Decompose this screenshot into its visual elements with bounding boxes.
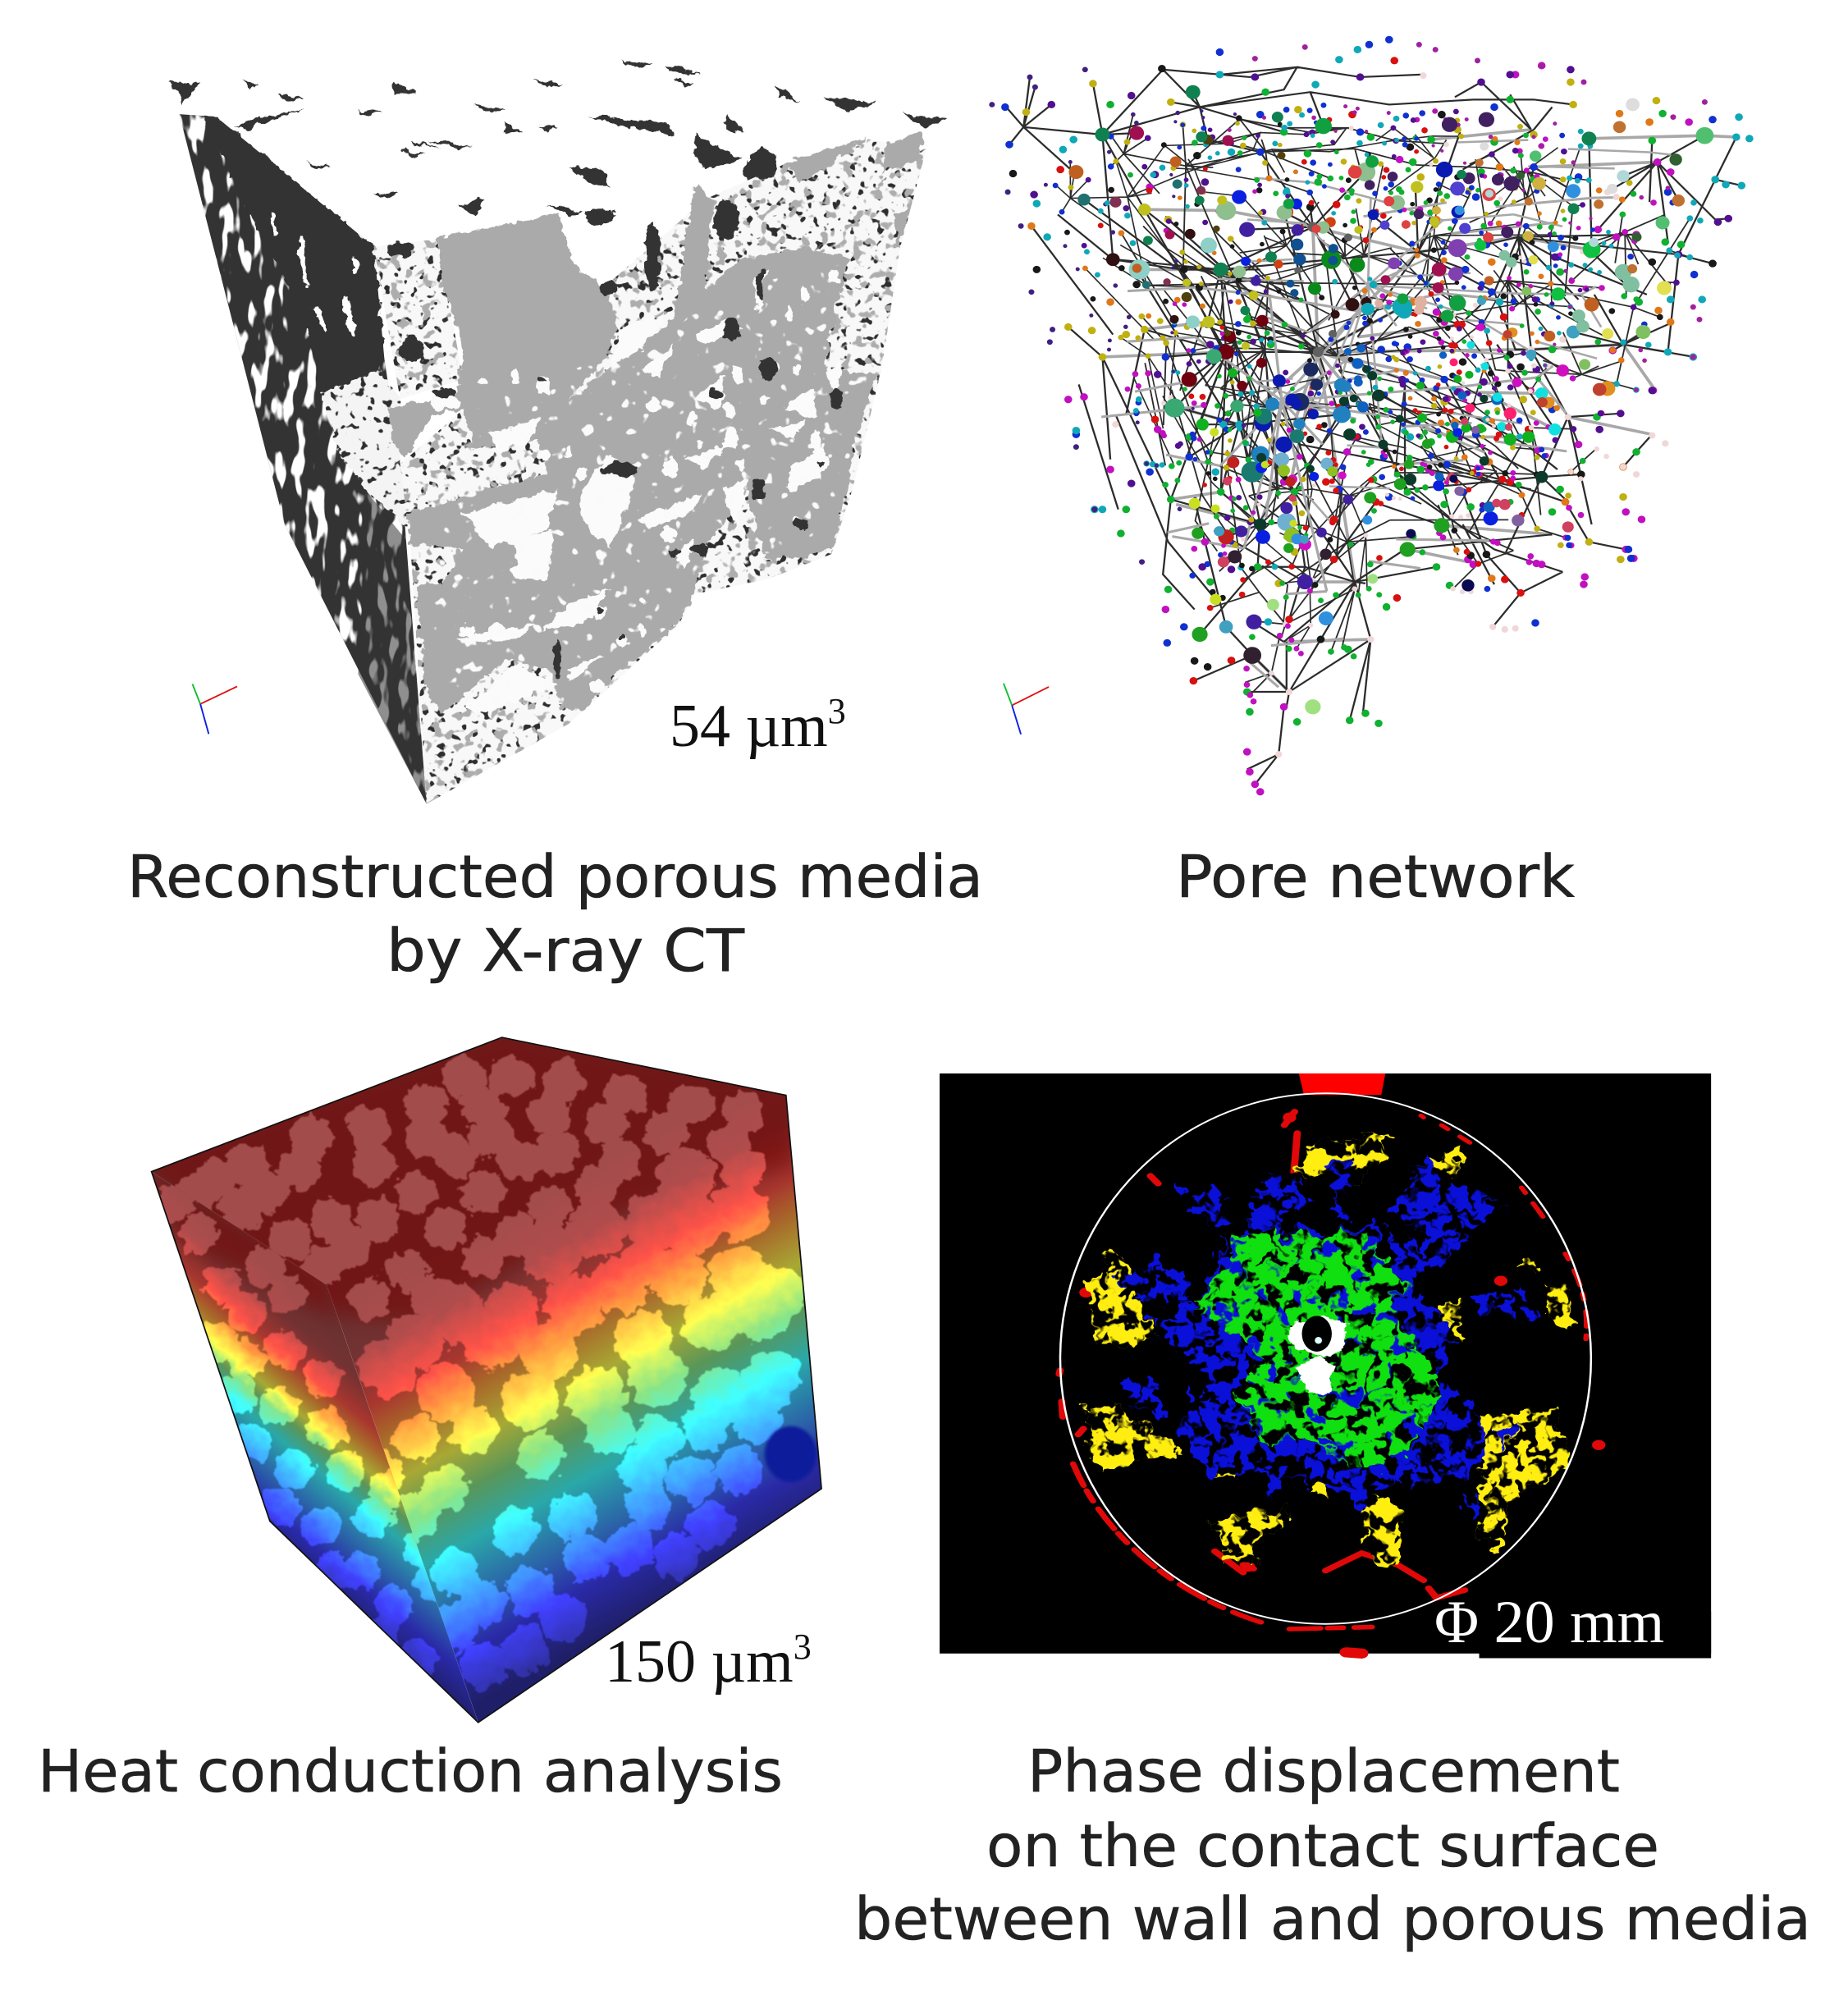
right and top faces with gradient <box>133 1026 821 1723</box>
red top bar <box>1299 1073 1385 1095</box>
scale label: 54 µm3: 3 <box>828 691 846 731</box>
black background <box>940 1073 1711 1654</box>
main gray cut face <box>387 131 921 714</box>
panel: pore network <box>992 39 1750 792</box>
top face dark pores <box>169 59 947 217</box>
white center <box>1288 1316 1347 1394</box>
panel: heat conduction cube <box>133 1026 821 1723</box>
axes indicator <box>1004 684 1049 735</box>
caption: heat conduction analysis: Heat conduction analysis <box>38 1737 783 1805</box>
dark lower left strip <box>358 494 427 804</box>
scale label: 150 µm3: 3 <box>794 1627 812 1667</box>
caption: phase displacement: between wall and porous media <box>854 1885 1811 1953</box>
solid dark shadow on upper left face <box>206 117 384 399</box>
cube outline <box>152 1037 821 1723</box>
panel: phase displacement map <box>940 1073 1711 1658</box>
central black hole <box>1302 1316 1332 1352</box>
pore nodes large <box>1076 92 1704 707</box>
caption: reconstructed porous media: by X-ray CT <box>387 917 745 985</box>
white boundary circle <box>1060 1093 1591 1624</box>
dark pore blob <box>765 1426 817 1482</box>
caption: phase displacement: Phase displacement <box>1027 1737 1620 1805</box>
caption: reconstructed porous media: Reconstructed porous media <box>127 843 983 911</box>
black mottling on green <box>1193 1230 1440 1471</box>
caption: reconstructed porous media <box>127 843 983 985</box>
scale label: phi 20 mm: Φ 20 mm <box>1434 1589 1664 1656</box>
scale label: 150 µm3: 150 µm <box>605 1628 794 1696</box>
extra pore nodes <box>1040 76 1709 740</box>
white pore regions on gray face <box>430 269 842 714</box>
white textured zones <box>374 140 926 804</box>
network throats dark <box>1006 67 1741 785</box>
grains <box>194 1077 776 1664</box>
blue ring and arms <box>1116 1156 1539 1518</box>
axes indicator <box>192 684 237 734</box>
black label patch <box>1480 1612 1711 1658</box>
caption: pore network: Pore network <box>1176 843 1575 911</box>
pore nodes small <box>992 39 1750 792</box>
left face with gradient <box>133 1160 478 1723</box>
red darkening of top face gaps <box>133 1026 805 1322</box>
panel: reconstructed porous media cube <box>169 59 947 804</box>
red rim fragments <box>1059 1112 1599 1654</box>
left mottled face <box>179 114 427 804</box>
yellow patches <box>1085 1133 1572 1568</box>
streaks in dark face <box>272 214 355 334</box>
scale label: 54 µm3: 54 µm <box>670 693 828 760</box>
extra large pore nodes <box>1092 101 1669 660</box>
left grains <box>175 1201 436 1660</box>
random pore holes <box>427 264 868 709</box>
caption: phase displacement: on the contact surface <box>986 1812 1659 1880</box>
green centre <box>1193 1230 1440 1471</box>
black mottling on outer phases <box>1085 1133 1572 1568</box>
red darkening on top of left face <box>153 1172 339 1320</box>
light textured middle band of left face <box>322 369 411 529</box>
blue noise on green <box>1193 1230 1440 1471</box>
pore shadow details <box>387 149 843 679</box>
extra network layers <box>1052 95 1700 734</box>
caption: phase displacement <box>854 1737 1811 1953</box>
network throats light <box>1102 130 1736 692</box>
colour phases with irregular edges <box>1085 1133 1572 1568</box>
